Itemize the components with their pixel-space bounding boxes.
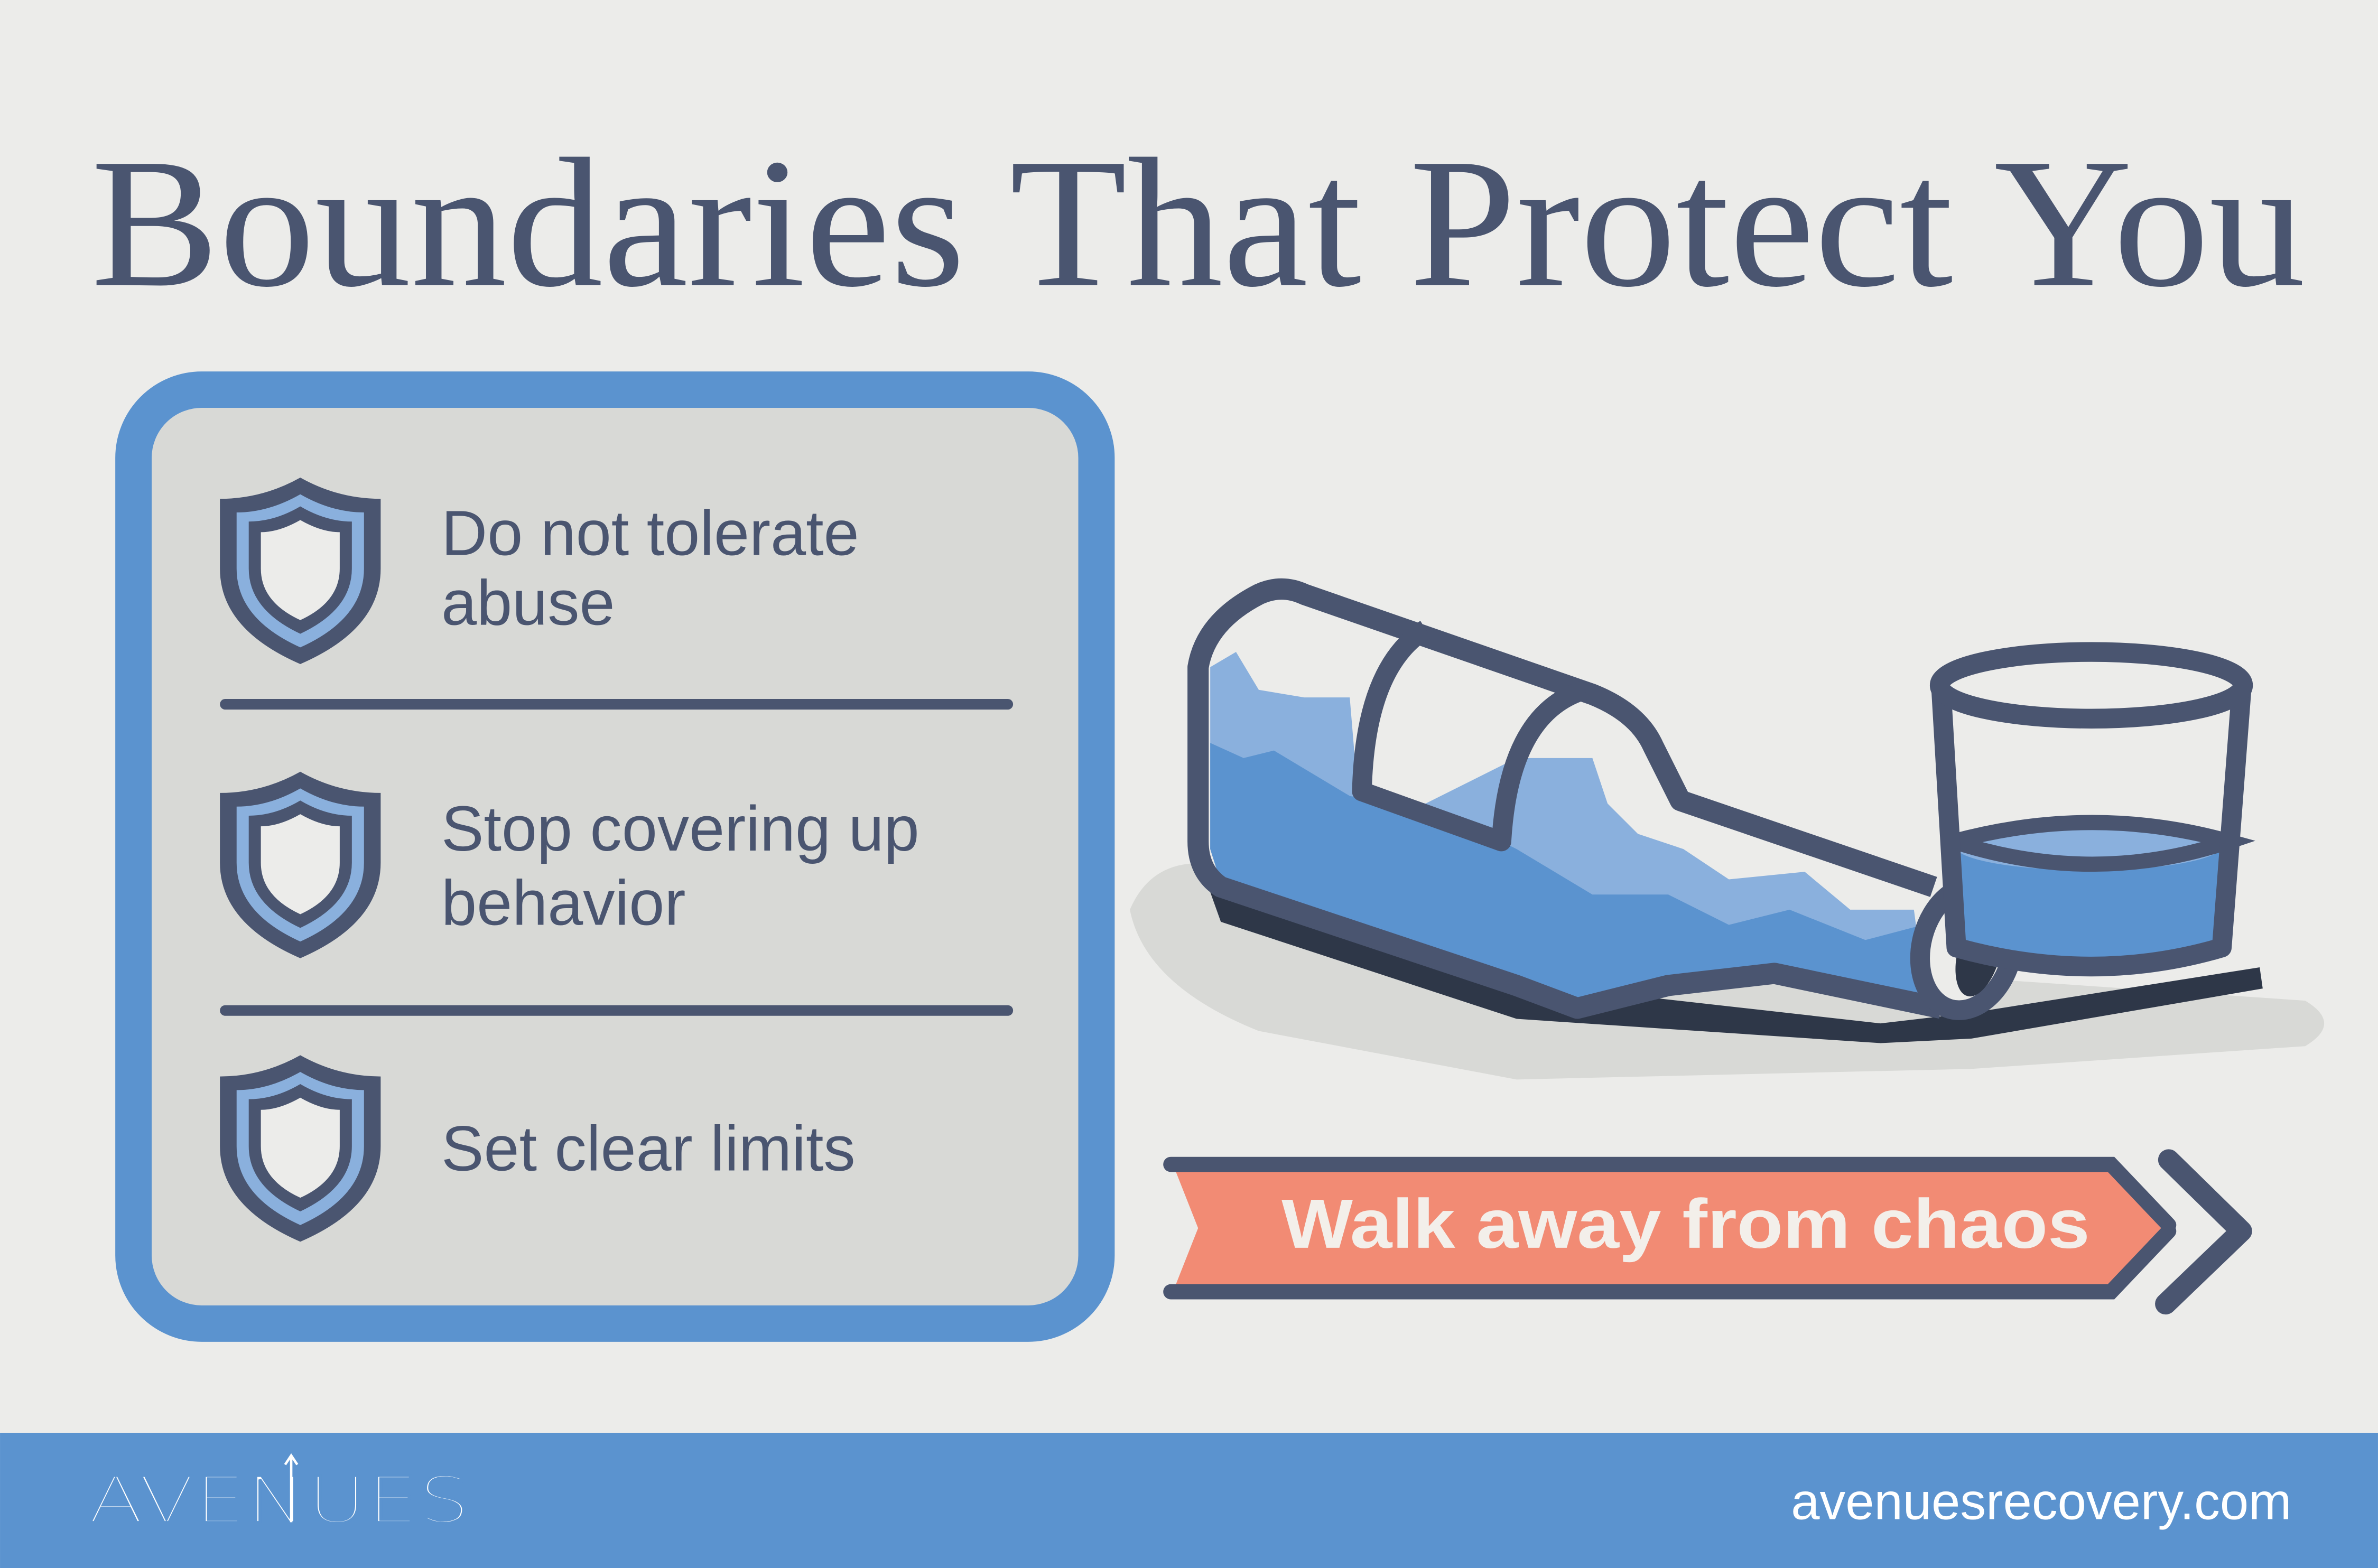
title: Boundaries That Protect You bbox=[91, 120, 2305, 325]
url: avenuesrecovery.com bbox=[1791, 1473, 2291, 1530]
text: item 1: Do not tolerate bbox=[441, 497, 859, 568]
item: stop covering up behavior: behavior bbox=[441, 867, 685, 939]
illustration: spilled bottle and glass bbox=[1130, 589, 2324, 1079]
panel: boundaries list bbox=[134, 390, 1097, 1323]
item: do not tolerate abuse: abuse bbox=[441, 567, 615, 638]
banner text: Walk away from chaos bbox=[1281, 1184, 2090, 1263]
banner arrow: walk away from chaos bbox=[1171, 1160, 2242, 1304]
icon: shield 3 bbox=[220, 1055, 380, 1242]
bottle bbox=[1198, 589, 1941, 1008]
icon: shield 2 bbox=[220, 772, 380, 958]
text: item 2: Stop covering up bbox=[441, 793, 919, 864]
icon: shield 1 bbox=[220, 478, 380, 664]
item: set clear limits bbox=[220, 1055, 856, 1242]
item: stop covering up behavior bbox=[220, 772, 919, 958]
glass bbox=[1941, 690, 2242, 967]
logo: avenues: AVENUES bbox=[88, 1463, 470, 1537]
item: do not tolerate abuse bbox=[220, 478, 859, 664]
text: item 3: Set clear limits bbox=[441, 1113, 856, 1184]
footer bar bbox=[0, 1433, 2378, 1568]
